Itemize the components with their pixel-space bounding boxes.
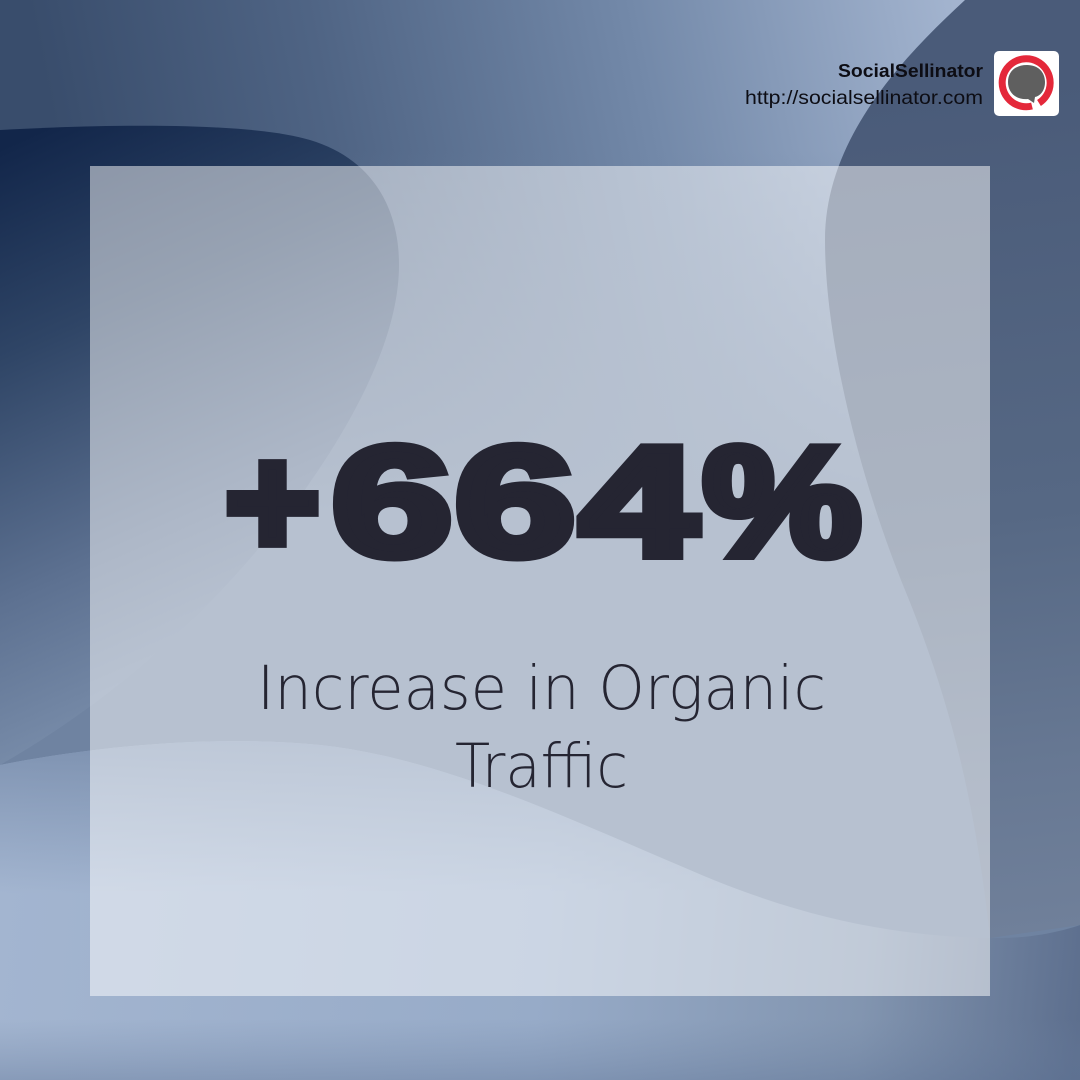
brand text: SocialSellinator xyxy=(838,60,983,81)
brand text xyxy=(745,60,983,109)
background curve: navy xyxy=(0,126,399,765)
headline number xyxy=(225,415,861,588)
logo xyxy=(994,51,1059,116)
background wave shading xyxy=(0,741,1080,1080)
caption xyxy=(257,653,826,802)
headline number: 6 xyxy=(332,415,452,588)
panel: translucent card xyxy=(90,166,990,996)
caption: Increase in Organic xyxy=(257,653,826,724)
headline number: 4 xyxy=(580,415,697,588)
brand text: http://socialsellinator.com xyxy=(745,87,983,109)
caption: Traffic xyxy=(455,731,628,802)
headline number: + xyxy=(225,415,320,588)
background curve: bottom wave xyxy=(0,741,1080,1080)
headline number: % xyxy=(703,415,861,588)
headline number: 6 xyxy=(455,415,575,588)
background curve: right xyxy=(825,0,1080,938)
